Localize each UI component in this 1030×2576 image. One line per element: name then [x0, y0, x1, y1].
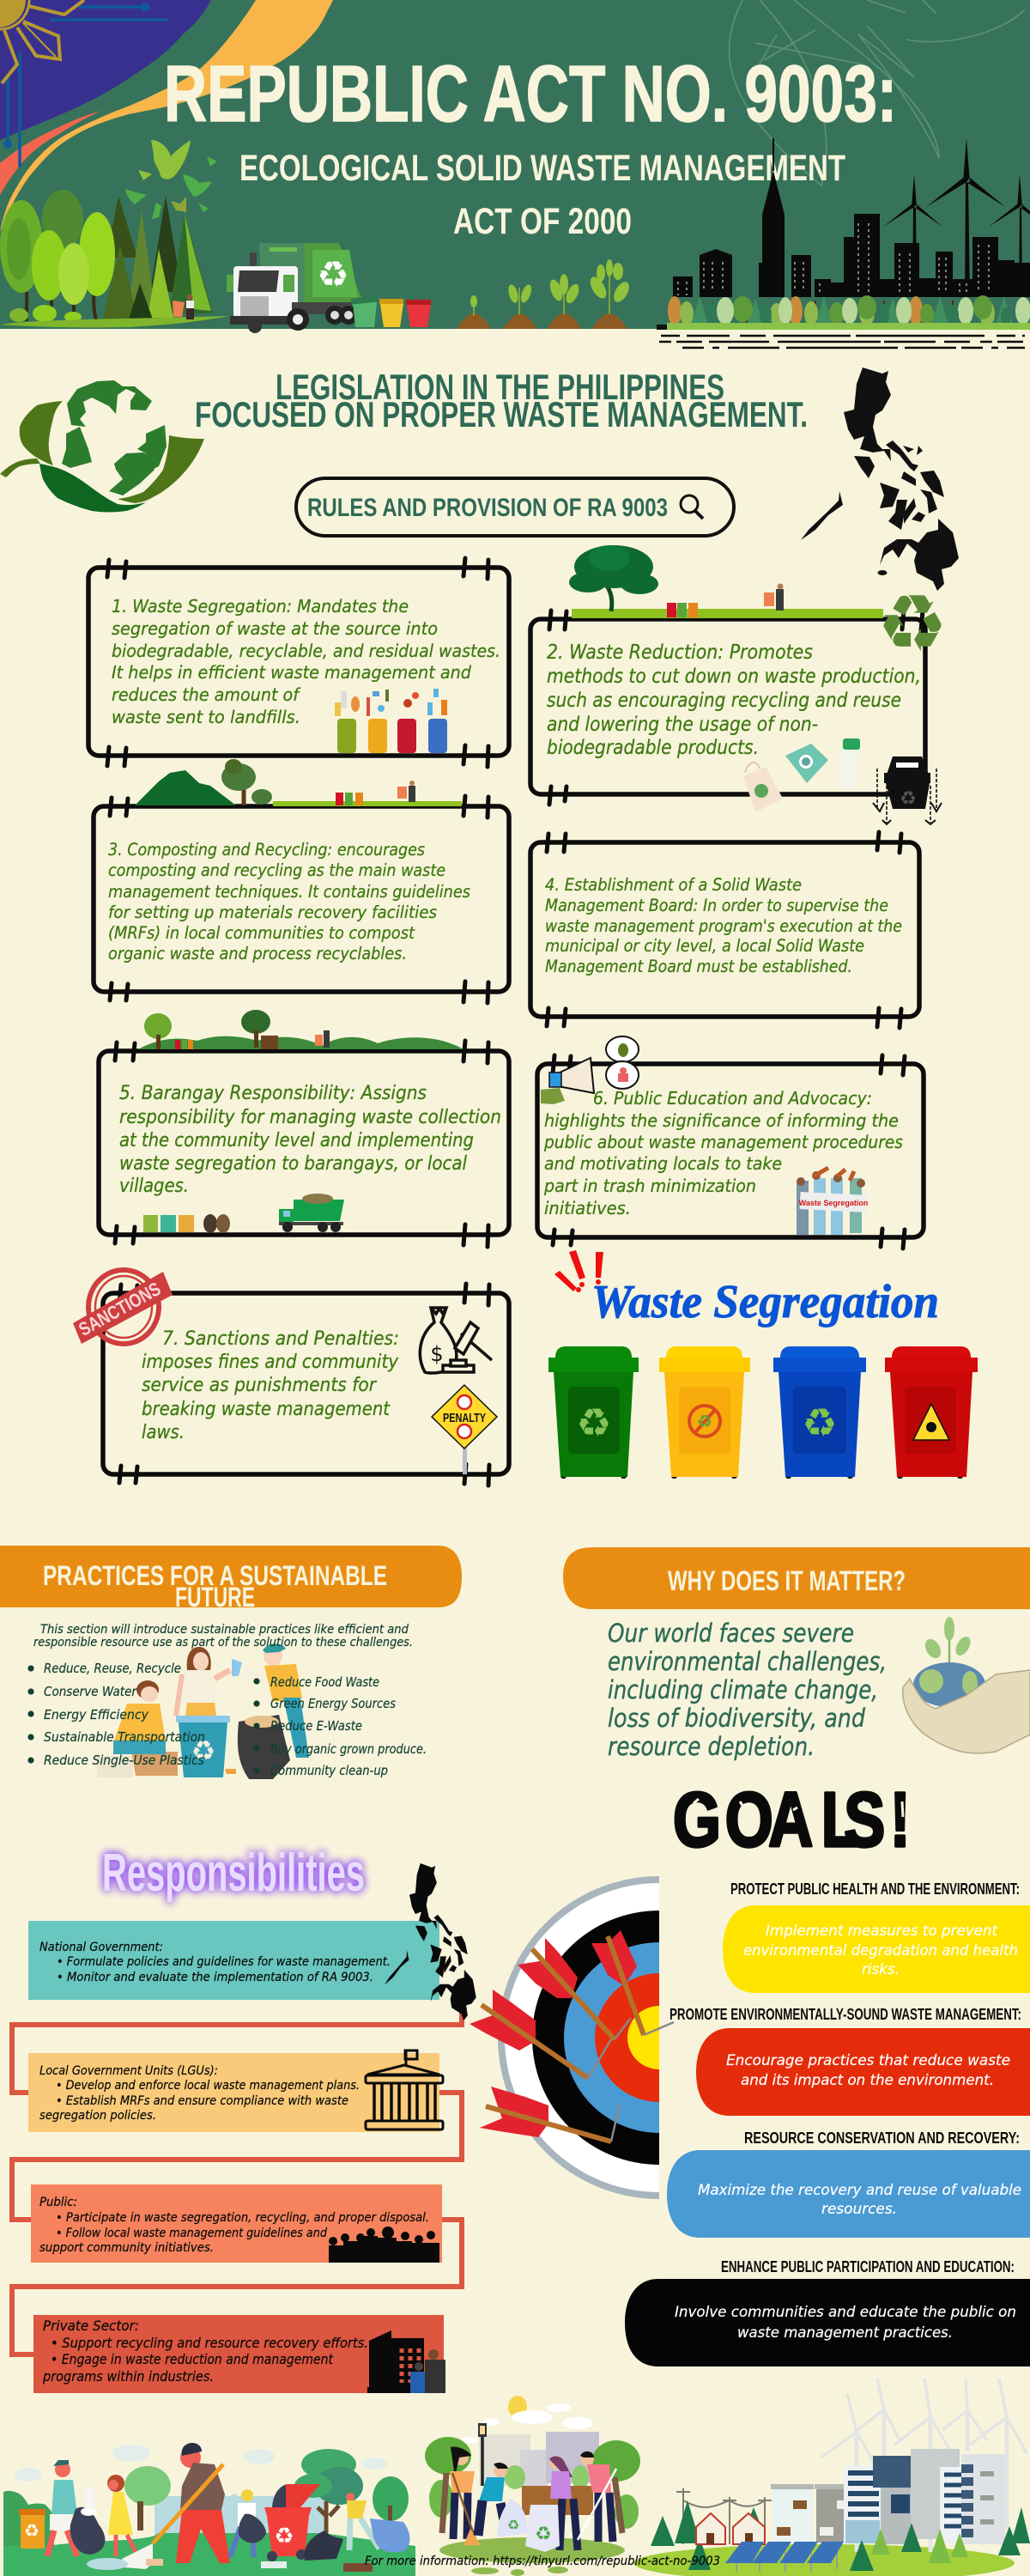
forest illustration: [0, 190, 230, 327]
text: imposes fines and community: [142, 1352, 399, 1373]
header banner: [0, 0, 1030, 333]
goal 1: [723, 1880, 1030, 1993]
goal 4: Involve communities and educate the public on: [675, 2304, 1016, 2320]
heading pill: practices: FUTURE: [175, 1582, 255, 1613]
text: segregation of waste at the source into: [112, 618, 438, 639]
text: 3. Composting and Recycling: encourages: [108, 840, 425, 860]
icon: black bin with arrows: ♻: [900, 788, 917, 810]
list: practices left: [27, 1661, 205, 1768]
icon: hands holding earth: [903, 1617, 1030, 1753]
goal 1: Implement measures to prevent: [766, 1923, 998, 1939]
icon: yellow bin: [659, 1346, 750, 1479]
text: why it matters: environmental challenges,: [608, 1647, 887, 1676]
panel: private sector: • Engage in waste reduction and management: [51, 2351, 334, 2367]
list: practices right: [254, 1674, 427, 1778]
text: 6. Public Education and Advocacy:: [593, 1088, 872, 1109]
list: practices right: Green Energy Sources: [270, 1696, 396, 1711]
icon: penalty sign: [432, 1385, 497, 1474]
goal 3: [667, 2129, 1030, 2238]
icon: arrows: [470, 1930, 674, 2142]
list: practices left: Sustainable Transportation: [44, 1729, 205, 1745]
text: why it matters: Our world faces severe: [608, 1619, 854, 1648]
panel: public: • Participate in waste segregation, recycling, and proper disposal.: [56, 2211, 429, 2225]
illustration: park volunteers: [425, 2396, 640, 2576]
text: waste sent to landfills.: [112, 707, 300, 727]
panel: 7 sanctions and penalties: [73, 1270, 509, 1485]
icon: crowd silhouette: [329, 2227, 439, 2263]
panel: national government: National Government:: [39, 1941, 163, 1954]
panel: local government units: segregation policies.: [39, 2109, 156, 2123]
seedlings: [457, 259, 633, 329]
heading: waste segregation: Waste Segregation: [591, 1275, 939, 1327]
panel: local government units: [28, 2050, 443, 2132]
text: management techniques. It contains guidelines: [108, 882, 470, 902]
goal 4: waste management practices.: [737, 2324, 953, 2341]
text: villages.: [119, 1176, 189, 1197]
panel: private sector: • Support recycling and resource recovery efforts.: [51, 2335, 368, 2351]
illustration: grass, tree, bins and person: [569, 545, 883, 618]
text: why it matters: [608, 1619, 887, 1761]
panel: public: Public:: [39, 2196, 77, 2209]
illustration: hills with trees and person: [138, 1010, 464, 1049]
list: practices right: Reduce E-Waste: [270, 1718, 362, 1734]
city skyline with wind turbines: [673, 138, 1030, 297]
icon: government building: [366, 2050, 443, 2129]
heading: legislation: FOCUSED ON PROPER WASTE MANAGEMENT.: [195, 394, 808, 434]
text: Management Board must be established.: [545, 957, 852, 976]
icon: yellow bin: ♻: [697, 1411, 712, 1431]
heading pill: why does it matter: [563, 1547, 1030, 1609]
text: responsibility for managing waste collection: [119, 1107, 501, 1128]
icon: green bin: [548, 1346, 639, 1479]
text: 4. Establishment of a Solid Waste: [545, 875, 802, 895]
panel: local government units: Local Government Units (LGUs):: [39, 2064, 218, 2078]
icon: tote, lunch box and bottle: [743, 738, 860, 812]
goal 3: resources.: [821, 2201, 897, 2217]
subtitle: [239, 148, 845, 242]
text: laws.: [142, 1422, 185, 1443]
list: practices left: Conserve Water: [44, 1684, 137, 1699]
illustration: green city with turbines and solar: [633, 2379, 1030, 2576]
row of trees: [657, 295, 1030, 330]
illustration: people with banner: Waste Segregation: [799, 1199, 868, 1207]
panel: 5 barangay responsibility: [99, 1010, 509, 1247]
goal 2: [670, 2006, 1030, 2116]
text: [119, 1083, 501, 1197]
heading pill: practices: PRACTICES FOR A SUSTAINABLE: [43, 1560, 387, 1591]
text: organic waste and process recyclables.: [108, 944, 407, 963]
text: 7. Sanctions and Penalties:: [162, 1328, 399, 1350]
illustration: people with banner: [797, 1168, 868, 1235]
text: [142, 1328, 399, 1443]
panel: private sector: programs within industries.: [42, 2368, 214, 2385]
text: composting and recycling as the main waste: [108, 860, 445, 880]
glitch line art under the skyline: [659, 336, 1025, 348]
icon: blue bin: ♻: [802, 1400, 838, 1446]
heading: legislation: [195, 367, 808, 434]
icon: blue bin: [773, 1346, 866, 1479]
text: 2. Waste Reduction: Promotes: [547, 641, 813, 664]
illustration: mountain, trees, bins and person: [135, 759, 462, 806]
text: part in trash minimization: [543, 1176, 756, 1196]
goal 2: and its impact on the environment.: [741, 2072, 994, 2088]
small bins: [351, 295, 431, 327]
text: intro: [33, 1623, 413, 1649]
illustration: community clean-up: [3, 2443, 415, 2576]
text: initiatives.: [544, 1198, 631, 1218]
garbage truck: ♻: [317, 253, 349, 295]
pill heading: rules and provision: [296, 478, 734, 536]
connector flow line: [12, 2011, 462, 2354]
text: such as encouraging recycling and reuse: [547, 690, 901, 712]
text: [547, 641, 921, 759]
icon: penalty sign: PENALTY: [443, 1411, 486, 1425]
icon: money bag and gavel: $: [430, 1342, 444, 1366]
icon: recycling arrows: ♻: [877, 578, 948, 670]
text: intro: responsible resource use as part of the solution to these challenges.: [33, 1636, 413, 1649]
icon: money bag and gavel: [420, 1308, 492, 1373]
panel: 3 composting and recycling: [94, 759, 509, 1003]
heading pill: why does it matter: WHY DOES IT MATTER?: [668, 1565, 906, 1596]
icon: black bin with arrows: [873, 756, 942, 824]
subtitle: ACT OF 2000: [453, 201, 632, 242]
text: service as punishments for: [142, 1375, 378, 1396]
heading: goals: GOALS!: [673, 1777, 911, 1863]
panel: 6 public education: [537, 1036, 924, 1249]
illustration: bins, bags and truck: [143, 1194, 344, 1233]
text: for setting up materials recovery facilities: [108, 902, 437, 922]
icon: four bins with rubbish: [335, 689, 447, 753]
heading pill: practices: [0, 1546, 462, 1613]
icon: Philippines map: [801, 368, 959, 591]
leaf outlines: [729, 0, 1025, 185]
panel: local government units: • Establish MRFs and ensure compliance with waste: [56, 2094, 348, 2108]
list: practices right: Reduce Food Waste: [270, 1674, 379, 1690]
text: 5. Barangay Responsibility: Assigns: [119, 1083, 427, 1104]
panel: public: [31, 2184, 442, 2263]
icon: red bin: [885, 1346, 978, 1479]
panel: 4 solid waste management board: [530, 832, 919, 1028]
panel: 2 waste reduction: [530, 545, 948, 824]
text: breaking waste management: [142, 1399, 391, 1420]
list: practices left: Reduce Single-Use Plastics: [44, 1753, 204, 1768]
panel: public: support community initiatives.: [39, 2241, 214, 2255]
text: 1. Waste Segregation: Mandates the: [112, 596, 409, 617]
text: municipal or city level, a local Solid Waste: [545, 936, 864, 956]
text: highlights the significance of informing the: [544, 1110, 899, 1131]
goal 2: Encourage practices that reduce waste: [726, 2052, 1010, 2069]
icon: globe in a leaf: [0, 380, 204, 512]
icon: megaphone with speech bubbles: [541, 1036, 639, 1104]
footer note: For more information: https://tinyurl.com/republic-act-no-9003: [365, 2555, 720, 2568]
subtitle: ECOLOGICAL SOLID WASTE MANAGEMENT: [239, 148, 845, 189]
text: methods to cut down on waste production,: [547, 665, 921, 688]
icon: butterflies: [125, 140, 217, 219]
illustration: people sorting waste: [97, 1643, 309, 1779]
chart: archery target: [470, 1876, 674, 2199]
text: biodegradable products.: [547, 737, 759, 759]
text: waste management program's execution at the: [545, 916, 902, 936]
text: and motivating locals to take: [544, 1153, 782, 1174]
text: intro: This section will introduce sustainable practices like efficient and: [40, 1623, 409, 1637]
panel: national government: • Formulate policies and guidelines for waste management.: [57, 1955, 391, 1969]
text: and lowering the usage of non-: [547, 714, 818, 736]
icon: buildings with businessmen: [367, 2330, 445, 2393]
panel: public: • Follow local waste management guidelines and: [56, 2227, 328, 2240]
goal 3: Maximize the recovery and reuse of valuable: [698, 2182, 1021, 2198]
garbage truck: [227, 243, 365, 333]
pill heading: rules and provision: RULES AND PROVISION OF RA 9003: [307, 494, 668, 522]
heading: responsibilities: Responsibilities: [102, 1844, 365, 1903]
text: why it matters: loss of biodiversity, and: [608, 1704, 866, 1733]
text: Management Board: In order to supervise the: [545, 896, 888, 915]
illustration: park volunteers: ♻: [535, 2524, 552, 2545]
text: It helps in efficient waste management and: [112, 662, 472, 683]
icon: Philippines map small: [385, 1863, 476, 2020]
list: practices right: Community clean-up: [270, 1763, 388, 1778]
list: practices left: Energy Efficiency: [44, 1707, 149, 1722]
text: [543, 1088, 903, 1218]
goal 4: [625, 2258, 1030, 2366]
text: why it matters: including climate change,: [608, 1675, 878, 1704]
panel: private sector: [33, 2315, 445, 2393]
text: biodegradable, recyclable, and residual wastes.: [112, 641, 500, 661]
list: practices left: Reduce, Reuse, Recycle: [44, 1661, 181, 1676]
illustration: community clean-up: ♻: [24, 2520, 39, 2541]
icon: sanctions stamp: SANCTIONS: [75, 1278, 164, 1340]
goal 1: risks.: [862, 1961, 900, 1978]
heading: legislation: LEGISLATION IN THE PHILIPPINES: [276, 367, 724, 407]
panel: private sector: Private Sector:: [43, 2318, 139, 2334]
text: public about waste management procedures: [543, 1132, 903, 1152]
icon: red exclamation marks: [554, 1250, 603, 1292]
illustration: park volunteers: ♻: [507, 2517, 519, 2533]
text: waste segregation to barangays, or local: [119, 1153, 467, 1175]
icon: green bin: ♻: [576, 1400, 612, 1446]
panel: 1 waste segregation: [88, 558, 509, 767]
text: (MRFs) in local communities to compost: [108, 923, 415, 943]
text: [112, 596, 500, 727]
panel: local government units: • Develop and enforce local waste management plans.: [56, 2079, 360, 2093]
text: [108, 840, 470, 963]
illustration: community clean-up: ♻: [274, 2524, 294, 2549]
decorative flag swoosh: [0, 0, 333, 232]
panel: national government: [28, 1921, 439, 2000]
text: reduces the amount of: [112, 684, 301, 705]
panel: national government: • Monitor and evaluate the implementation of RA 9003.: [57, 1971, 373, 1984]
text: why it matters: resource depletion.: [608, 1732, 815, 1761]
text: at the community level and implementing: [119, 1130, 474, 1151]
goal 1: environmental degradation and health: [743, 1942, 1018, 1959]
text: [545, 875, 902, 976]
list: practices right: Buy organic grown produce.: [270, 1741, 427, 1757]
illustration: people sorting waste: ♻: [191, 1735, 215, 1767]
